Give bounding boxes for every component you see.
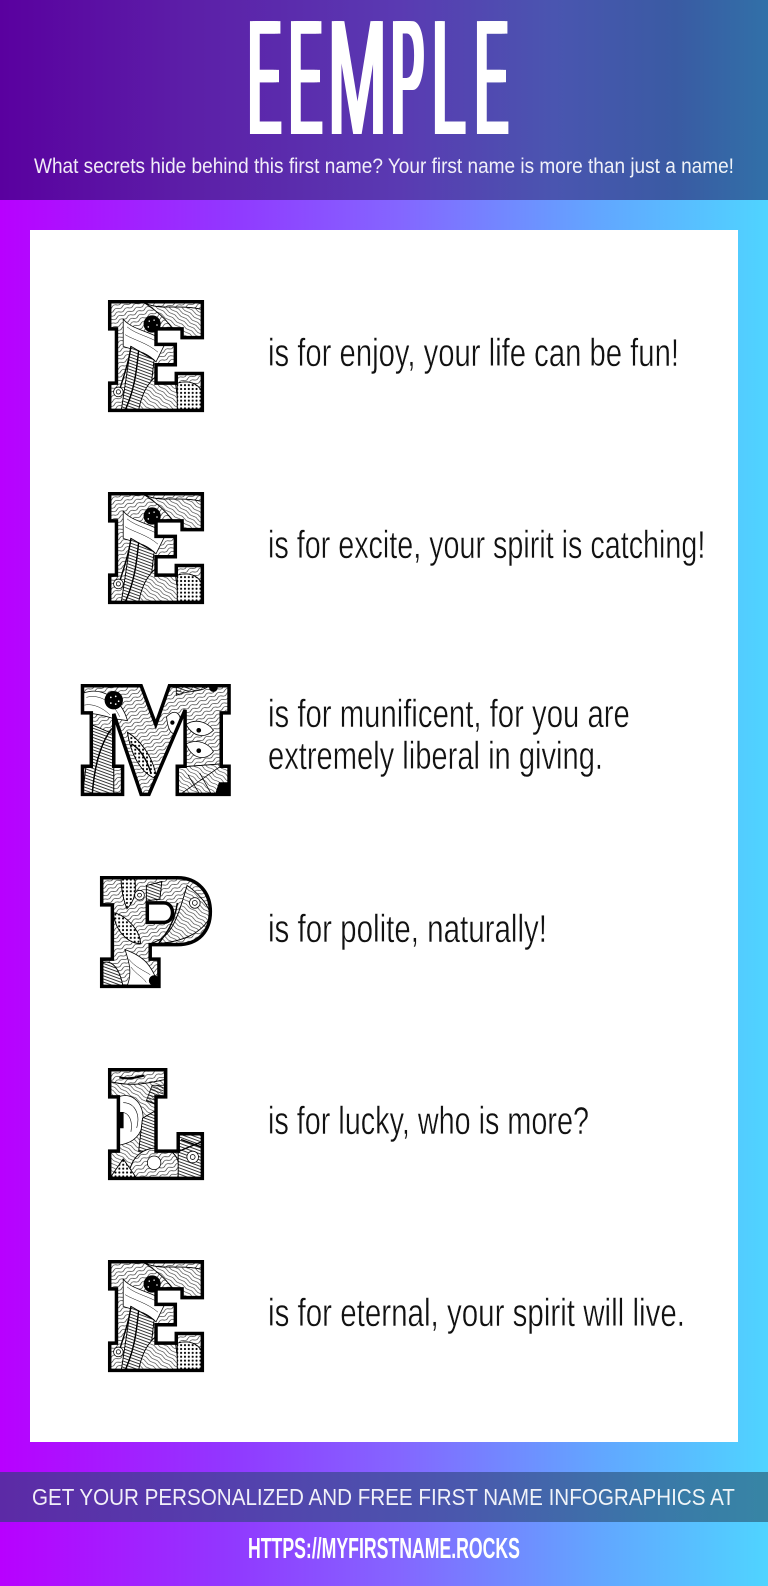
row 3: text bbox=[268, 693, 630, 778]
title bbox=[246, 0, 508, 169]
row 2: text: is for excite, your spirit is catching! bbox=[268, 524, 705, 567]
row 3: text: extremely liberal in giving. bbox=[268, 735, 603, 778]
row 4: letter P illustration bbox=[102, 878, 210, 986]
row 3: letter M illustration bbox=[82, 684, 229, 794]
row 6: letter E illustration bbox=[110, 1262, 202, 1370]
row 5: text: is for lucky, who is more? bbox=[268, 1100, 589, 1143]
header band bbox=[0, 0, 768, 200]
row 3: text: is for munificent, for you are bbox=[268, 693, 630, 736]
row 1: text: is for enjoy, your life can be fun! bbox=[268, 332, 679, 375]
row 6: text: is for eternal, your spirit will live. bbox=[268, 1292, 685, 1335]
footer band bbox=[0, 1472, 768, 1522]
row 4: text: is for polite, naturally! bbox=[268, 908, 547, 951]
row 5: letter L illustration bbox=[110, 1070, 202, 1178]
panel: white card bbox=[30, 230, 738, 1442]
row 1: letter E illustration bbox=[110, 302, 202, 410]
footer call to action text: GET YOUR PERSONALIZED AND FREE FIRST NAME INFOGRAPHICS AT bbox=[32, 1484, 735, 1510]
row 2: letter E illustration bbox=[110, 494, 202, 602]
